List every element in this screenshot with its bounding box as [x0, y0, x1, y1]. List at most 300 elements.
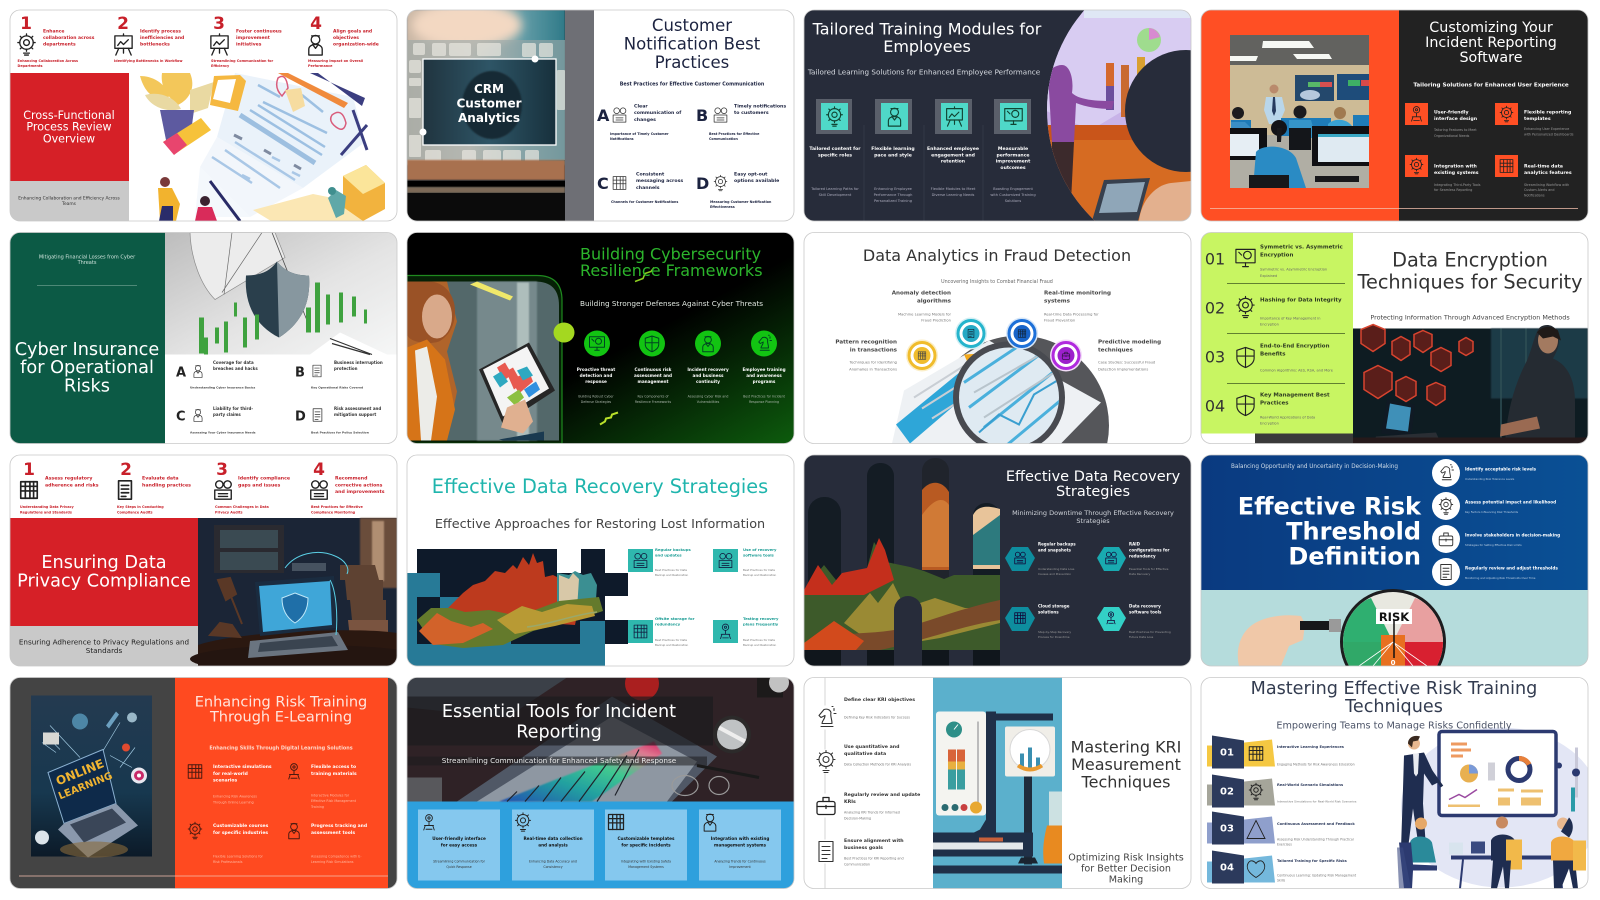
item C: party claims [213, 412, 241, 417]
module 1: specific roles [818, 152, 852, 158]
module 3: Flexible Modules to Meet [931, 187, 976, 191]
item D: options available [734, 178, 779, 184]
step 02: Real-World Scenario Simulations [1277, 783, 1343, 787]
technique 02: Importance of Key Management in [1260, 316, 1320, 320]
subheading: Uncovering Insights to Combat Financial Fraud [941, 279, 1053, 285]
item A: communication of [634, 110, 682, 116]
step 2: bottlenecks [140, 42, 170, 48]
module 4: Boosting Engagement [993, 187, 1033, 191]
feature 3: for specific industries [213, 830, 268, 836]
title panel: Risks [64, 376, 110, 396]
heading: Effective Data Recovery [1006, 469, 1181, 485]
feature 2: Essential Tools for Effective [1129, 567, 1169, 571]
step 3: Involve stakeholders in decision-making [1465, 532, 1560, 538]
subtitle panel: Enhancing Collaboration and Efficiency Across [18, 196, 120, 202]
technique 02 [1205, 296, 1342, 326]
step 04: 04 [1220, 862, 1234, 874]
item 2 [814, 744, 911, 774]
item 1: Defining Key Risk Indicators for Success [844, 716, 910, 720]
subheading: Enhancing Skills Through Digital Learning Solutions [209, 746, 353, 752]
step 3: Streamlining Communication for [211, 59, 273, 63]
tool card 4: Integration with existing [711, 836, 769, 841]
slide: Essential Tools for Incident Reporting [407, 666, 794, 888]
step 2 [114, 14, 184, 63]
feature 1: and updates [655, 553, 682, 558]
heading: Software [1459, 50, 1523, 66]
slide: Mastering Effective Risk Training Techniques [1201, 678, 1600, 888]
module 2: Enhancing Employee [874, 187, 913, 191]
grey divider strip [565, 10, 594, 221]
subtitle panel: Teams [61, 201, 77, 207]
tool card 2: Real-time data collection [523, 836, 583, 841]
pillar 1: response [585, 379, 607, 384]
feature 1 [1405, 103, 1477, 138]
feature 2: Enhancing User Experience [1524, 127, 1569, 131]
photo: hand holding magnifier over risk gauge: 0 [1391, 659, 1396, 667]
illustration: measuring instrument [933, 678, 1062, 888]
feature 4 [1495, 155, 1572, 197]
slide: Cross-Functional Process Review Overview [10, 10, 397, 221]
subtitle panel: Standards [86, 646, 122, 655]
feature 1: Regular backups [1038, 542, 1076, 546]
pillar 4: Best Practices for Incident [743, 394, 786, 398]
feature 1: interface design [1434, 116, 1477, 122]
feature 1: Backup and Restoration [655, 573, 689, 577]
photo: incident control room [1230, 35, 1369, 188]
feature 2 [1495, 103, 1574, 136]
step 01 [1207, 736, 1355, 768]
pillar 4: programs [753, 379, 776, 384]
title panel [10, 518, 198, 626]
module 2: pace and style [874, 152, 912, 158]
feature 1: scenarios [213, 778, 237, 784]
feature 1: and snapshots [1038, 548, 1071, 552]
item C: Liability for third- [213, 406, 253, 411]
item D: Easy opt-out [734, 172, 768, 178]
item 4: business goals [844, 845, 883, 851]
slide: Data Encryption Techniques for Security [1201, 232, 1588, 444]
step 2: inefficiencies and [140, 35, 184, 41]
pillar 3 [687, 330, 729, 404]
heading: Incident Reporting [1425, 35, 1557, 51]
step 2 [117, 460, 191, 514]
heading: Tailored Training Modules for [812, 20, 1042, 38]
item C: Consistent [636, 172, 665, 178]
pillar 1 [577, 330, 615, 404]
feature 4: Data recovery [1129, 604, 1161, 608]
item 3: KRIs [844, 799, 856, 805]
pillar 1: Building Robust Cyber [578, 394, 614, 398]
feature 4 [1097, 604, 1171, 639]
title panel: Ensuring Data [41, 553, 167, 573]
feature 2 [1097, 542, 1169, 576]
technique 01: 01 [1205, 250, 1225, 268]
item B [295, 360, 383, 390]
feature 3: existing systems [1434, 170, 1479, 176]
callout: anomaly detection: Machine Learning Models for [898, 312, 951, 316]
tool card 2: Consistency [543, 865, 563, 869]
item A: A [176, 366, 186, 380]
title panel: Overview [43, 132, 95, 145]
subheading: Strategies [1076, 517, 1110, 525]
subheading: Empowering Teams to Manage Risks Confidently [1276, 720, 1512, 732]
item B: Timely notifications [734, 104, 786, 110]
pillar 3: Assessing Cyber Risk and [688, 394, 728, 398]
subheading: for Better Decision [1081, 864, 1171, 874]
pillar 3: Vulnerabilities [697, 400, 720, 404]
subtitle panel: Ensuring Adherence to Privacy Regulations and [19, 638, 189, 646]
technique 01: Encryption [1260, 252, 1293, 258]
step 1: Departments [18, 64, 43, 68]
item A: Importance of Timely Customer [610, 132, 669, 136]
feature 3: Cloud storage [1038, 604, 1070, 608]
title panel: Mitigating Financial Losses from Cyber [39, 254, 136, 260]
tool card 3: Integrating with Existing Safety [621, 860, 671, 864]
technique 03: 03 [1205, 348, 1225, 366]
feature 4: Best Practices for Data [743, 638, 775, 642]
feature 2 [713, 547, 777, 577]
feature 1: Causes and Prevention [1038, 572, 1071, 576]
tool card 4: Improvement [729, 865, 751, 869]
item C: Channels for Customer Notifications [611, 200, 678, 204]
tool card 1: Streamlining Communication for [433, 860, 486, 864]
icon: blue ring [1006, 318, 1038, 350]
step 2: Identifying Bottlenecks in Workflow [114, 59, 183, 63]
slide: Data Analytics in Fraud Detection [804, 232, 1191, 516]
technique 04: Real-World Applications of Data [1260, 416, 1315, 420]
step 04 [1207, 850, 1357, 884]
item B: Best Practices for Effective [709, 132, 760, 136]
step 3: Strategies for Setting Effective Risk Limits [1465, 543, 1522, 547]
callout: predictive modeling [1098, 340, 1161, 372]
image: data mountains in rounded pillars [804, 455, 1000, 666]
photo panel: woman with tablet [407, 276, 562, 444]
module 1: Tailored content for [809, 146, 861, 152]
subheading: Protecting Information Through Advanced Encryption Methods [1370, 314, 1570, 322]
feature 3 [188, 822, 269, 864]
title panel: Threats [77, 260, 97, 266]
step 1: Enhancing Collaboration Across [18, 59, 78, 63]
step 1: Understanding Risk Tolerance Levels [1465, 477, 1515, 481]
tool card 1: User-friendly interface [432, 836, 486, 841]
slide: Customer Notification Best Practices [407, 3, 794, 221]
heading: Techniques [1344, 697, 1443, 717]
heading: Practices [655, 53, 729, 72]
step 04: Skills [1277, 878, 1286, 882]
feature 2: training materials [311, 771, 357, 777]
footer bar [1255, 434, 1353, 444]
icon: yellow ring [906, 340, 938, 372]
item 4 [814, 838, 904, 866]
feature 1: Tailoring Features to Meet [1433, 128, 1477, 132]
pillar 4 [742, 330, 786, 404]
heading: Notification Best [624, 34, 761, 54]
subheading: Making [1109, 874, 1143, 886]
feature 4: assessment tools [311, 830, 355, 836]
technique 03: End-to-End Encryption [1260, 344, 1330, 350]
feature 3: Backup and Restoration [655, 643, 689, 647]
pillar 2 [634, 330, 672, 404]
item A: A [597, 106, 610, 125]
step 1: Identify acceptable risk levels [1465, 466, 1537, 472]
feature 1 [628, 547, 691, 577]
feature 4: Streamlining Workflow with [1524, 183, 1569, 187]
feature 3: Customizable courses [213, 823, 269, 829]
step 3: gaps and issues [238, 482, 280, 488]
module 4 [990, 99, 1036, 203]
slide: Ensuring Data Privacy Compliance [10, 455, 430, 673]
heading: Enhancing Risk Training [195, 694, 367, 710]
heading: Strategies [1056, 484, 1130, 500]
item D [696, 172, 779, 209]
item B: to customers [734, 110, 769, 116]
feature 3: Flexible Learning Solutions for [213, 854, 263, 858]
step 01: 01 [1220, 748, 1234, 758]
feature 4: Custom Alerts and [1524, 188, 1554, 192]
heading: Techniques [1081, 772, 1170, 792]
slide: Enhancing Risk Training Through E-Learning [10, 678, 397, 888]
step 4: 4 [310, 14, 322, 34]
technique 01: Symmetric vs. Asymmetric Encryption [1260, 268, 1327, 272]
pillar 4: Response Planning [749, 400, 779, 404]
technique 02: Encryption [1260, 322, 1279, 326]
feature 4: Learning Risk Simulations [311, 860, 354, 864]
step 4: Best Practices for Effective [311, 505, 363, 509]
feature 2: Backup and Restoration [743, 573, 777, 577]
step 3: 3 [216, 460, 228, 480]
step 03: Exercises [1277, 842, 1292, 846]
icon: teal ring [955, 318, 987, 350]
feature 3 [628, 616, 695, 647]
item D: D [696, 174, 709, 193]
step 03: 03 [1220, 824, 1234, 834]
item 3: Decision-Making [844, 816, 871, 820]
step 3: 3 [213, 14, 225, 34]
heading: Techniques for Security [1356, 270, 1583, 294]
tool card 2 [512, 810, 594, 880]
subtitle panel [10, 181, 129, 221]
subheading: Streamlining Communication for Enhanced Safety and Response [442, 756, 677, 765]
module 2: Flexible learning [871, 146, 915, 152]
slide: Mastering KRI Measurement Techniques [804, 678, 1191, 888]
callout: predictive modeling: Case Studies: Successful Fraud [1098, 360, 1155, 364]
step 4: Regularly review and adjust thresholds [1465, 566, 1558, 570]
feature 3 [1005, 604, 1071, 639]
illustration: isometric documents [140, 73, 385, 221]
feature 4: software tools [1129, 610, 1162, 614]
callout: real-time monitoring: systems [1044, 298, 1071, 304]
step 04: Tailored Training for Specific Risks [1277, 859, 1347, 863]
step 2: 2 [120, 460, 132, 480]
illustration: team in front of a dashboard [1397, 728, 1600, 888]
feature 3: for Seamless Reporting [1434, 188, 1472, 192]
pillar 2: Key Components of [637, 394, 669, 398]
step 03 [1207, 812, 1355, 846]
item A [176, 360, 258, 390]
heading: Measurement [1071, 755, 1181, 774]
pillar 2: Resilience Frameworks [635, 400, 672, 404]
callout: pattern recognition: Techniques for Identifying [848, 360, 897, 364]
subheading: Tailored Learning Solutions for Enhanced Employee Performance [807, 68, 1041, 76]
item A: breaches and hacks [213, 366, 258, 371]
feature 2: RAID [1129, 542, 1141, 546]
technique 03 [1205, 344, 1333, 372]
pillar 4: Employee training [742, 367, 786, 372]
item B [696, 104, 786, 141]
feature 2: Best Practices for Data [743, 568, 775, 572]
feature 3: Step-by-Step Recovery [1038, 630, 1071, 634]
heading: Effective Data Recovery Strategies [432, 475, 768, 498]
module 4: performance [996, 152, 1030, 158]
item B: Communication [709, 137, 739, 141]
step 1: Enhance [43, 28, 64, 34]
feature 3: Integration with [1434, 164, 1477, 170]
tool card 3: Customizable templates [617, 836, 675, 841]
subheading: Tailoring Solutions for Enhanced User Experience [1413, 82, 1569, 88]
feature 1: for real-world [213, 771, 248, 777]
item C: C [597, 174, 609, 193]
slide: Effective Risk Threshold Definition [1201, 455, 1588, 695]
item 3: Regularly review and update [844, 792, 920, 798]
item 4: Best Practices for KRI Reporting and [844, 856, 904, 860]
tool card 3: for specific incidents [621, 842, 671, 847]
photo: hand holding magnifier over risk gauge: RISK [1379, 610, 1410, 624]
step 3: Privacy Audits [215, 510, 242, 514]
tool card 3: Management Systems [628, 865, 664, 869]
tool card 3 [605, 810, 687, 880]
title panel [10, 73, 129, 181]
slide: Cyber Insurance for Operational Risks [10, 232, 397, 444]
title panel [10, 232, 165, 444]
feature 1: User-friendly [1434, 110, 1469, 116]
step 4 [311, 460, 385, 514]
item B: B [295, 366, 305, 380]
step 2: Key Factors Influencing Risk Thresholds [1465, 510, 1519, 514]
pillar 2: Continuous risk [635, 367, 672, 372]
module 4: Measurable [998, 146, 1028, 152]
slide: Tailored Training Modules for Employees [804, 10, 1191, 221]
technique 04 [1205, 392, 1330, 426]
item 2: Data Collection Methods for KRI Analysis [844, 762, 911, 766]
callout: anomaly detection: Anomaly detection [892, 290, 951, 296]
step 4: Monitoring and Adjusting Risk Thresholds Over Time [1465, 576, 1536, 580]
technique 04: Encryption [1260, 422, 1279, 426]
heading: CRM Customer Analytics: Customer [456, 96, 522, 110]
subheading: Optimizing Risk Insights [1068, 852, 1184, 864]
photo: desk with report and tools [407, 666, 794, 802]
subtitle panel [10, 626, 198, 666]
module 4: improvement [996, 159, 1031, 165]
step 3: Common Challenges in Data [215, 505, 269, 509]
step 4: Recommend [335, 476, 367, 482]
photo: analyst with hexagon shields [1353, 324, 1588, 444]
title panel: Process Review [26, 121, 112, 134]
step 2: handling practices [142, 482, 191, 488]
feature 1: Understanding Data Loss [1038, 567, 1075, 571]
photo: hand holding magnifier over risk gauge [1238, 585, 1446, 695]
subheading: Best Practices for Effective Customer Communication [620, 82, 765, 88]
feature 1: Best Practices for Data [655, 568, 687, 572]
step 4: organization-wide [333, 42, 379, 48]
photo: shield under umbrella with green bars [165, 232, 397, 354]
module 1 [809, 99, 861, 197]
decorative dark circle [1125, 50, 1191, 172]
slide: Customizing Your Incident Reporting Software [1201, 10, 1588, 221]
feature 2: Effective Risk Management [311, 799, 357, 803]
feature 3: Best Practices for Data [655, 638, 687, 642]
item 4: Communication [844, 862, 870, 866]
subheading: Effective Approaches for Restoring Lost Information [435, 517, 765, 532]
step 04: Continuous Learning: Updating Risk Management [1277, 874, 1357, 878]
module 3 [927, 99, 979, 197]
callout: anomaly detection: algorithms [917, 298, 952, 304]
feature 1 [1005, 542, 1076, 576]
step 1 [1432, 459, 1537, 487]
slide: Effective Data Recovery Strategies (dark) [804, 455, 1191, 666]
item A: Notifications [610, 137, 634, 141]
step 3: improvement [236, 35, 271, 41]
callout: real-time monitoring [1044, 290, 1111, 322]
feature 3: solutions [1038, 610, 1059, 614]
step 4: and improvements [335, 489, 385, 495]
feature 3 [1405, 155, 1481, 192]
feature 2: software tools [743, 553, 775, 558]
step 3: initiatives [236, 42, 262, 48]
technique 03: Common Algorithms: AES, RSA, and More [1260, 368, 1333, 372]
subheading: Minimizing Downtime Through Effective Recovery [1012, 509, 1174, 517]
module 4: outcomes [1000, 165, 1026, 171]
module 4: Solutions [1005, 199, 1021, 203]
illustration: magnifier over report [892, 336, 1109, 516]
step 4: Measuring Impact on Overall [308, 59, 363, 63]
feature 4: Testing recovery [743, 616, 779, 621]
step 1: collaboration across [43, 35, 95, 41]
tool card 1 [418, 810, 500, 880]
step 1: Regulations and Standards [20, 510, 72, 514]
item A: Coverage for data [213, 360, 254, 365]
feature 4: plans frequently [743, 622, 779, 627]
feature 2: configurations for [1129, 548, 1169, 552]
item 2: qualitative data [844, 751, 886, 757]
feature 3: Process for Downtime [1038, 635, 1070, 639]
callout: anomaly detection [892, 290, 952, 322]
step 4: Compliance Monitoring [311, 510, 356, 514]
callout: predictive modeling: Predictive modeling [1098, 340, 1161, 346]
title panel: Cyber Insurance [15, 340, 159, 360]
item C: C [176, 410, 186, 424]
step 1: adherence and risks [45, 482, 99, 488]
item C: channels [636, 185, 660, 191]
feature 1 [188, 764, 272, 804]
item 2: Use quantitative and [844, 744, 899, 750]
feature 2: Use of recovery [743, 547, 777, 552]
tool card 2: and analysis [538, 842, 568, 847]
pillar 2: management [637, 379, 669, 384]
step 1: Assess regulatory [45, 476, 92, 482]
item B: Key Operational Risks Covered [311, 386, 363, 390]
item 1: Define clear KRI objectives [844, 697, 915, 703]
feature 2: templates [1524, 116, 1551, 122]
feature 1: Interactive simulations [213, 764, 272, 770]
feature 1: Organizational Needs [1434, 134, 1470, 138]
technique 04: 04 [1205, 396, 1225, 416]
feature 2: Data Recovery [1129, 572, 1151, 576]
subheading: Balancing Opportunity and Uncertainty in Decision-Making [1231, 464, 1398, 470]
step 3 [215, 460, 290, 514]
slide: Effective Data Recovery Strategies (white) [407, 455, 794, 666]
feature 2 [289, 764, 357, 809]
item D: Effectiveness [710, 205, 735, 209]
